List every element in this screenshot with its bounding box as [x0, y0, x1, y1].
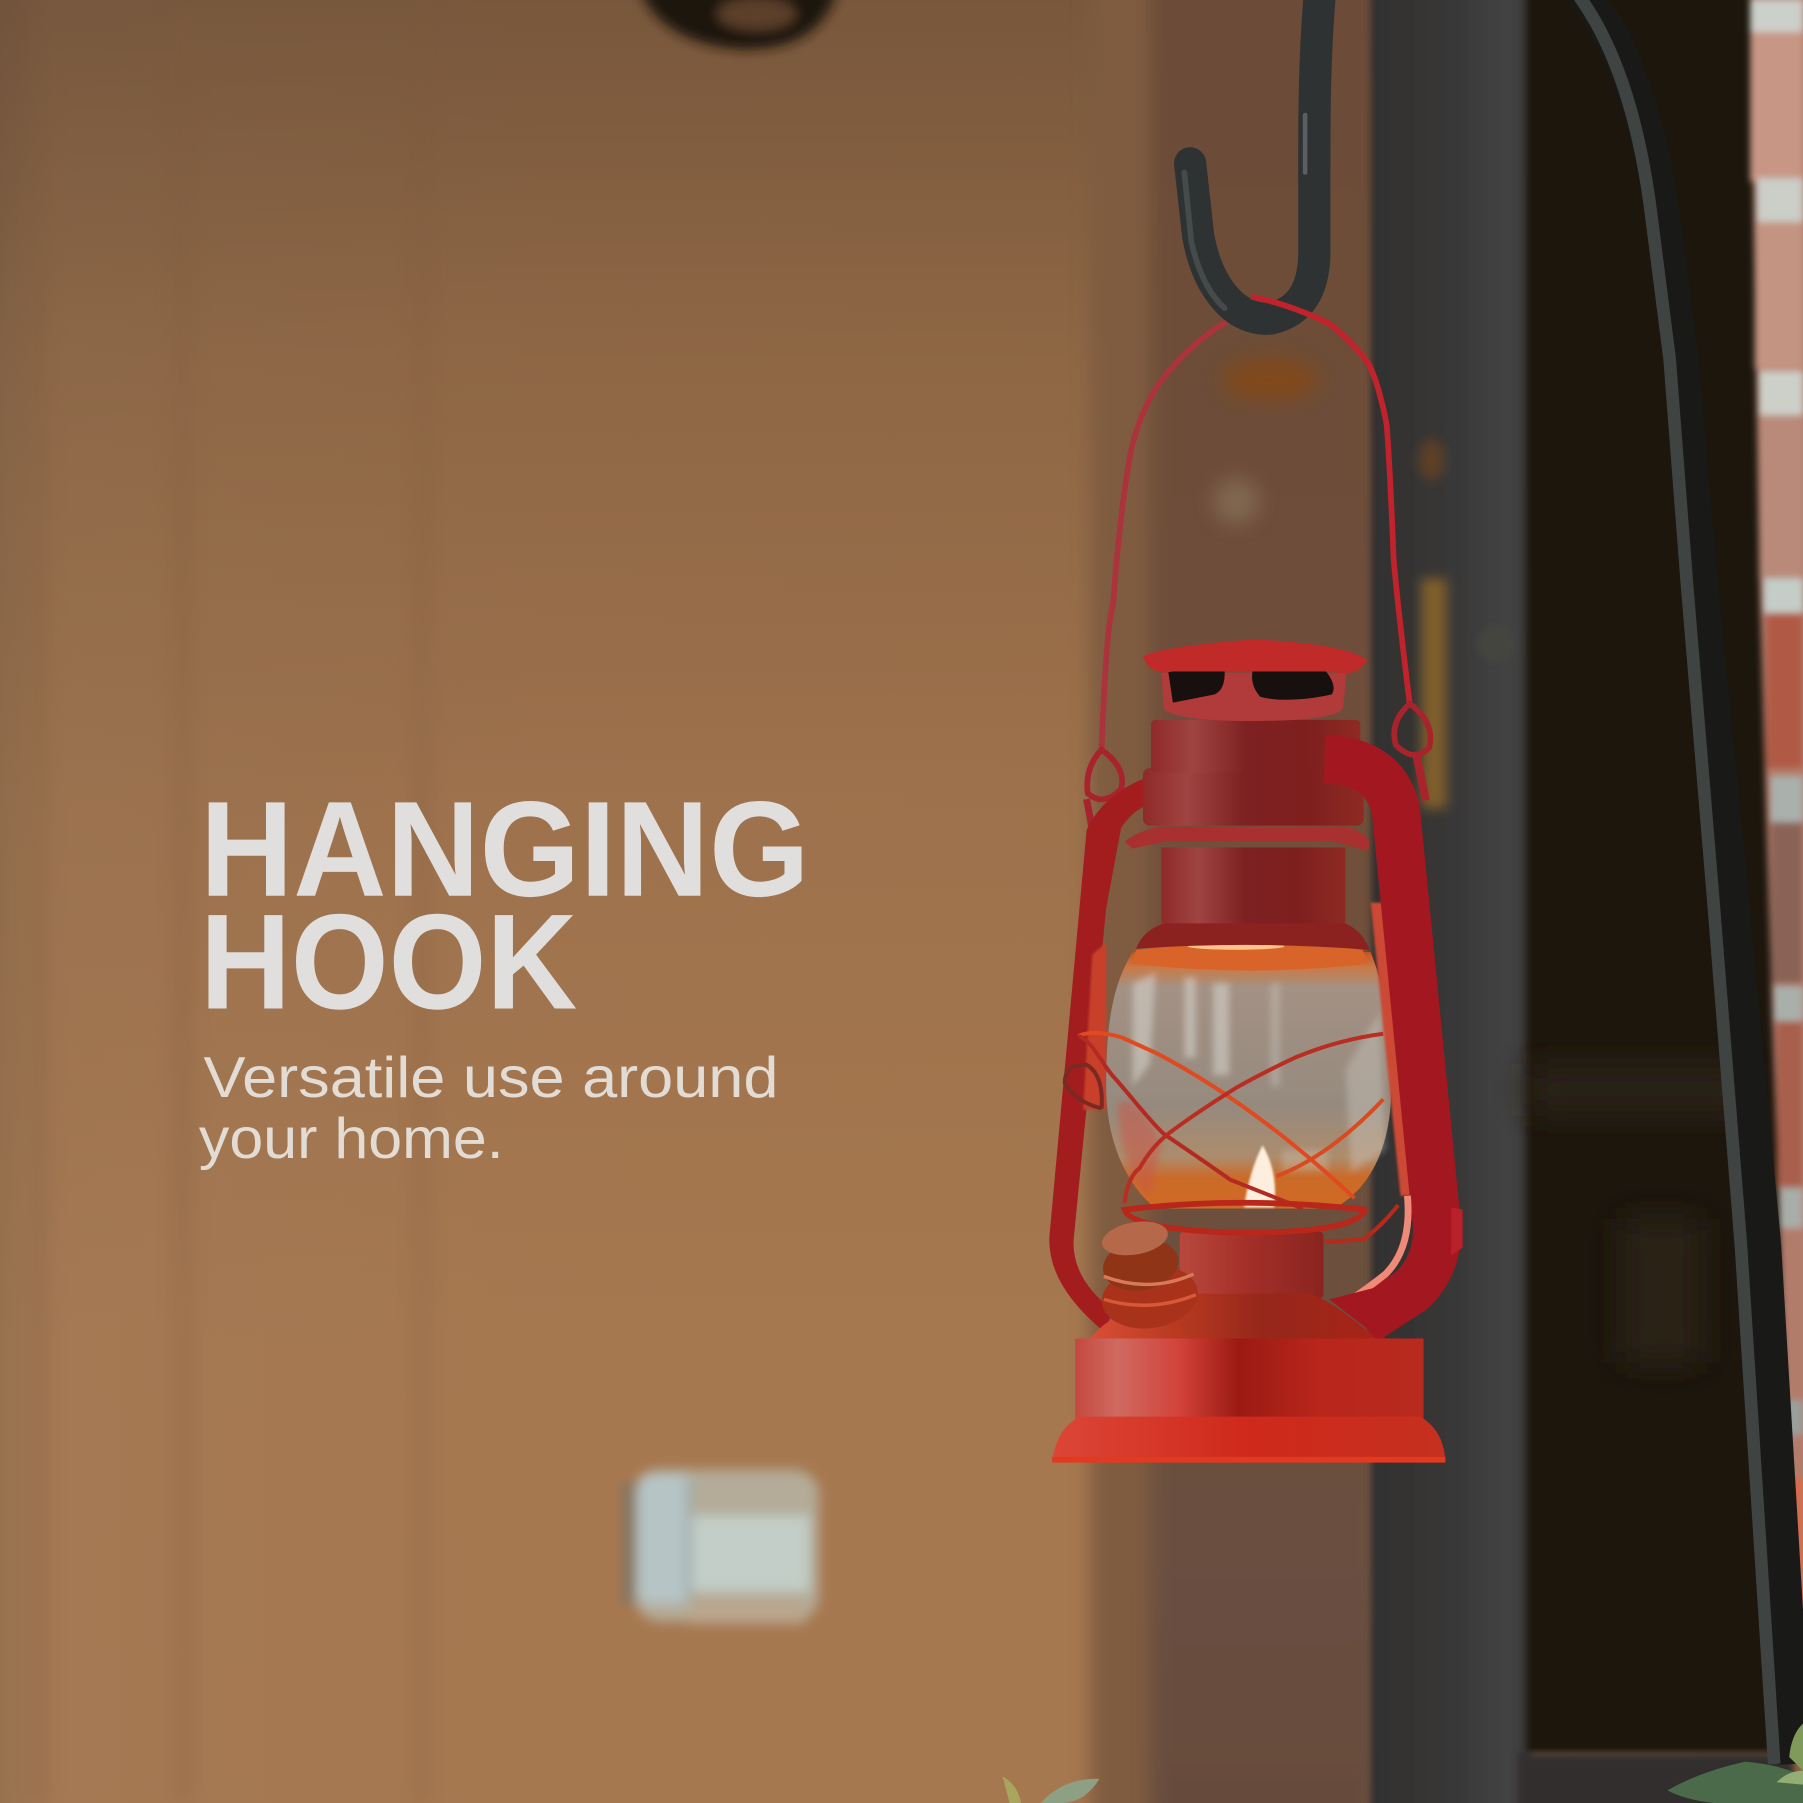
heading: HANGING HOOK: HANGING [200, 773, 810, 925]
right frame arm [1325, 759, 1463, 1343]
blurred wall outlet plate [623, 1470, 819, 1624]
subtitle text [199, 1046, 778, 1171]
neck [1180, 1232, 1324, 1298]
filler cap [1098, 1217, 1202, 1335]
flame [1244, 1145, 1275, 1207]
upper body [1143, 768, 1364, 826]
wire handle right side [1251, 297, 1410, 704]
wire handle left side [1102, 320, 1230, 750]
subtitle text: Versatile use around [204, 1046, 778, 1110]
vented cap [1143, 639, 1367, 721]
heading: HANGING HOOK [200, 773, 810, 1037]
font dome [1087, 1294, 1380, 1342]
metal shepherd pole [1578, 0, 1795, 1764]
plant leaves bottom centre [1003, 1777, 1099, 1803]
blurred amber reflections [1213, 358, 1447, 808]
chimney [1161, 847, 1345, 923]
brick wall edge [1750, 0, 1803, 1736]
red lantern [1049, 639, 1463, 1463]
subtitle text: your home. [199, 1107, 504, 1171]
handle loops [1087, 704, 1430, 830]
iron S hook [1184, 0, 1320, 319]
drum base [1075, 1338, 1424, 1419]
dark door frame [1371, 0, 1794, 1803]
blurred ceiling fixture [639, 0, 837, 49]
flared rim [1052, 1417, 1445, 1460]
wire guard [1065, 1033, 1398, 1242]
wire ring [1125, 1203, 1365, 1233]
plant leaves bottom right [1667, 1724, 1803, 1803]
collar above glass [1136, 921, 1369, 950]
heading: HANGING HOOK: HOOK [200, 885, 577, 1037]
glass globe [1106, 943, 1391, 1209]
left frame arm [1049, 777, 1148, 1332]
flange [1125, 827, 1369, 851]
